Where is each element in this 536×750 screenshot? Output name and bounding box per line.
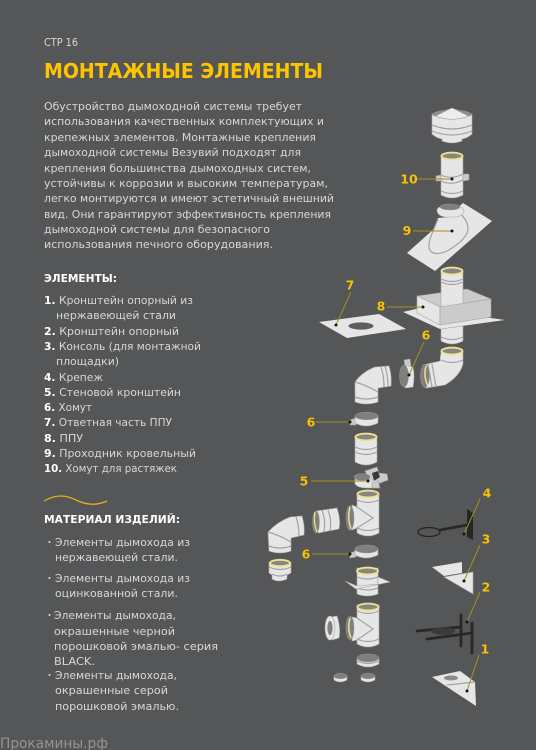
icon: short pipe — [312, 508, 340, 533]
title: МОНТАЖНЫЕ ЭЛЕМЕНТЫ — [44, 59, 323, 83]
icon: elbow left — [355, 366, 391, 404]
callout 9: 9 — [403, 223, 411, 238]
callout 6 middle: 6 — [307, 414, 316, 430]
intro text block — [44, 100, 334, 251]
callout 2 — [466, 580, 490, 624]
intro text block: дымоходной системы для безопасного — [44, 223, 270, 236]
callout 5: 5 — [300, 474, 308, 488]
elements list — [44, 294, 201, 475]
icon: chimney cap — [432, 108, 472, 143]
intro text block: вид. Они гарантируют эффективность крепления — [44, 208, 331, 221]
elements list: площадки) — [56, 355, 119, 368]
material list: BLACK. — [54, 655, 95, 668]
elements list: 5. Стеновой кронштейн — [44, 386, 181, 399]
intro text block: использования печного оборудования. — [44, 238, 273, 251]
material list — [48, 536, 218, 713]
callout 10 — [400, 172, 454, 186]
material list: Элементы дымохода, — [54, 609, 176, 622]
elements list: 7. Ответная часть ППУ — [44, 416, 172, 429]
material list: Элементы дымохода из — [55, 572, 190, 585]
callout 5 — [300, 474, 370, 488]
callout 1 — [466, 642, 489, 692]
callout 6 upper — [408, 328, 431, 376]
callout 7 — [334, 278, 354, 326]
elements list: 8. ППУ — [44, 432, 83, 445]
callout 3 — [462, 532, 490, 582]
intro text block: Обустройство дымоходной системы требует — [44, 100, 303, 113]
material list: Элементы дымохода, — [55, 669, 177, 682]
icon: small adapter — [269, 560, 291, 581]
callout 6 lower — [302, 546, 352, 562]
icon: tee upper — [346, 491, 379, 536]
icon: bracket 1 — [432, 671, 476, 706]
elements list: 10. Хомут для растяжек — [44, 462, 177, 475]
callout 8 — [377, 298, 424, 314]
elements list: нержавеющей стали — [56, 309, 176, 322]
icon: pipe with plate — [345, 568, 390, 596]
icon: roof penetration unit 8 — [403, 268, 505, 344]
intro text block: устойчивы к коррозии и высоким температурам, — [44, 177, 328, 190]
icon: elbow lower — [268, 516, 304, 553]
material heading: МАТЕРИАЛ ИЗДЕЛИЙ: — [44, 513, 180, 526]
intro text block: легко монтируются и имеют эстетичный внешний — [44, 192, 334, 205]
callout 3: 3 — [482, 532, 490, 546]
page number: СТР 16 — [44, 36, 78, 49]
elements list: 2. Кронштейн опорный — [44, 325, 179, 338]
callout 9 — [403, 223, 454, 238]
material list: оцинкованной стали. — [55, 587, 178, 600]
icon: tee lower — [346, 604, 379, 647]
callout 6 upper: 6 — [422, 328, 431, 342]
elements heading: ЭЛЕМЕНТЫ: — [44, 272, 117, 285]
callout 6 middle — [307, 414, 352, 430]
icon: clamp upper — [400, 359, 414, 388]
callout 7: 7 — [346, 278, 354, 292]
icon: wall bracket 5 — [354, 467, 388, 488]
intro text block: использования качественных комплектующих и — [44, 115, 324, 128]
elements list: 1. Кронштейн опорный из — [44, 294, 193, 307]
decorative squiggle — [44, 496, 107, 504]
icon: ring — [325, 616, 340, 640]
icon: bracket 4 — [418, 509, 473, 540]
icon: end cap — [357, 654, 379, 667]
callout 2: 2 — [482, 580, 490, 594]
icon: plate 7 — [319, 314, 406, 338]
callout 8: 8 — [377, 298, 385, 314]
elements list: 4. Крепеж — [44, 371, 103, 384]
material list: окрашенные серой — [55, 684, 168, 697]
icon: small caps — [334, 673, 375, 682]
material list: порошковой эмалью. — [55, 700, 179, 713]
material list: порошковой эмалью- серия — [54, 640, 218, 653]
elements list: 9. Проходник кровельный — [44, 447, 196, 460]
icon: pipe with guy clamp — [436, 153, 469, 198]
icon: elbow right — [420, 348, 463, 388]
material list: нержавеющей стали. — [55, 551, 178, 564]
icon: bracket 2 — [417, 615, 472, 653]
elements list: 6. Хомут — [44, 401, 93, 414]
callout 6 lower: 6 — [302, 546, 311, 562]
icon: pipe segment — [355, 434, 377, 465]
material list: окрашенные черной — [54, 625, 175, 638]
icon: bracket 3 — [432, 562, 473, 594]
material list: Элементы дымохода из — [55, 536, 190, 549]
callout 1: 1 — [481, 642, 489, 656]
icon: roof flashing — [407, 203, 492, 271]
intro text block: дымоходной системы Везувий подходят для — [44, 146, 301, 159]
icon: clamp middle — [350, 412, 378, 426]
callout 4 — [462, 486, 492, 536]
intro text block: крепежных элементов. Монтажные крепления — [44, 131, 316, 144]
elements list: 3. Консоль (для монтажной — [44, 340, 201, 353]
callout 10: 10 — [400, 172, 418, 186]
icon: clamp lower — [350, 545, 378, 558]
callout 4: 4 — [483, 486, 492, 500]
intro text block: крепления большинства дымоходных систем, — [44, 162, 311, 175]
